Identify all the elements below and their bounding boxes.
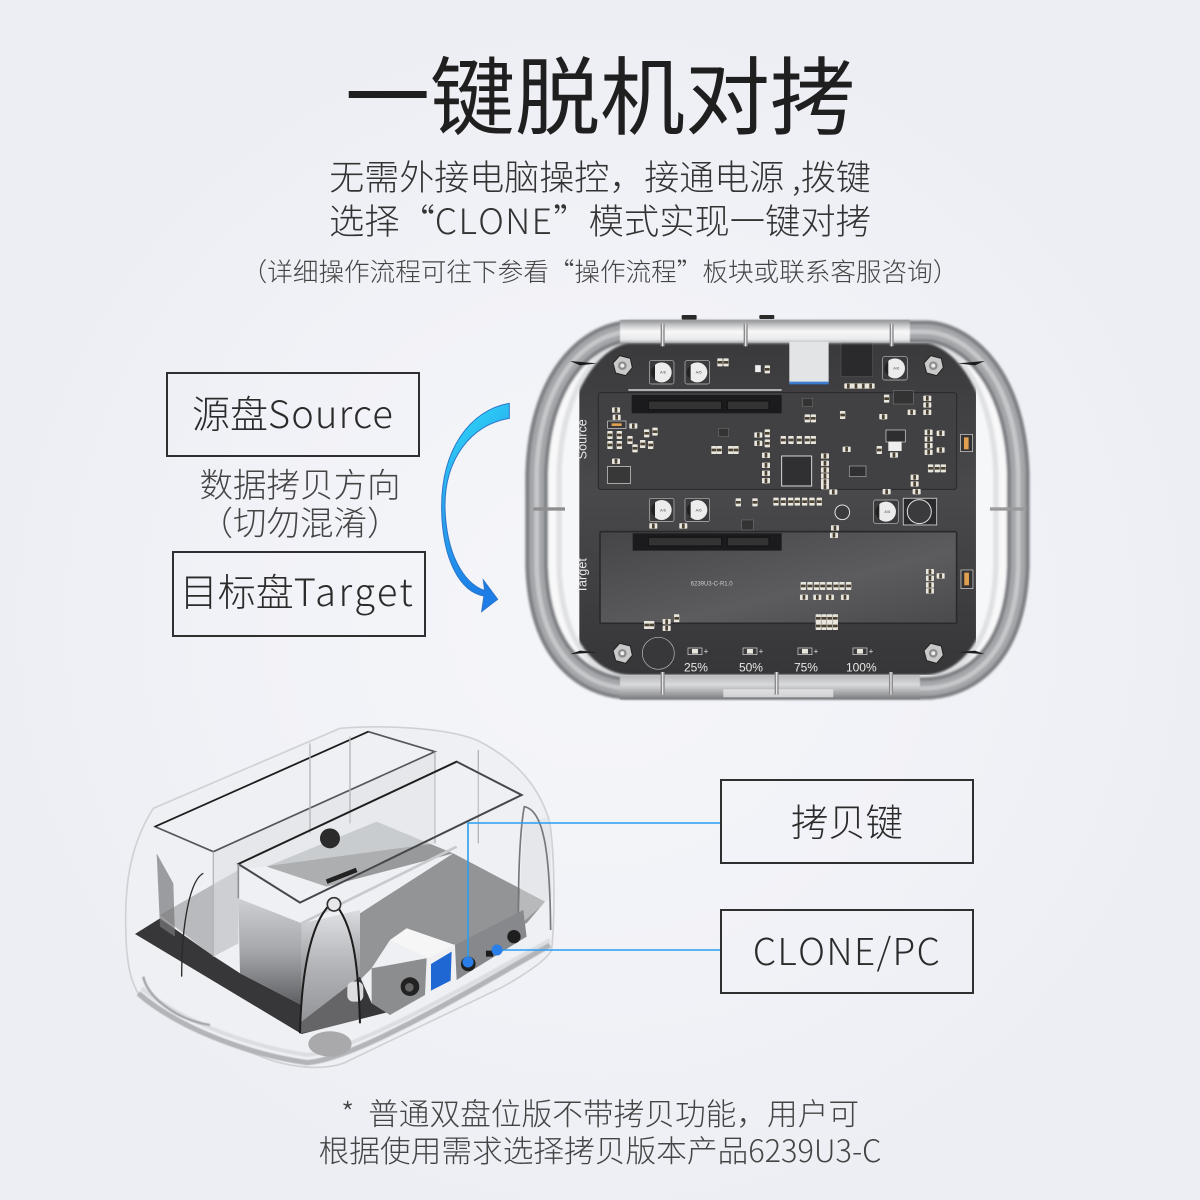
direction caption (200, 458, 400, 545)
bottom logo (723, 689, 833, 697)
board silkscreen labels: 50% (739, 660, 763, 674)
shell interior (537, 332, 1018, 688)
subtitle text: 无需外接电脑操控，接通电源 ,拨键 (329, 150, 871, 201)
rear wires (182, 873, 203, 977)
label: source disk: 源盘 (192, 384, 268, 439)
capacitor (347, 982, 363, 1002)
shell pins (661, 324, 665, 346)
front corner post (300, 902, 360, 1033)
buzzer (642, 637, 674, 669)
sata connectors (628, 389, 782, 551)
label: target disk (172, 551, 426, 637)
top clear band (620, 320, 910, 343)
label: CLONE/PC switch: CLONE/PC (753, 922, 941, 976)
shell ring (537, 332, 1018, 688)
label: copy key (720, 779, 974, 864)
callout line: clone switch (492, 944, 721, 956)
pcb right area (360, 853, 545, 980)
lower rim highlights (138, 940, 550, 1063)
board silkscreen labels (576, 419, 877, 674)
switches and side ticks (533, 315, 1027, 654)
usb port (789, 342, 829, 383)
outer shell (126, 727, 554, 1067)
foot (308, 1031, 352, 1057)
label: target disk: Target (294, 562, 415, 616)
pcb left area under rear bay (160, 870, 238, 957)
footnote (319, 1089, 881, 1171)
inductor (903, 498, 937, 525)
label: source disk (166, 372, 420, 457)
label: CLONE/PC switch (720, 909, 974, 994)
callout line: copy key (462, 823, 721, 968)
screws (613, 356, 632, 376)
footnote: 根据使用需求选择拷贝版本产品6239U3-C (319, 1126, 881, 1171)
board silkscreen labels: 25% (684, 660, 708, 674)
source bay (598, 393, 957, 489)
subtitle text: 选择“CLONE”模式实现一键对拷 (329, 194, 871, 245)
title: 一键脱机对拷 (345, 30, 855, 153)
subtitle text (329, 150, 871, 245)
label: target disk: 目标盘 (180, 562, 294, 616)
power jack (841, 342, 873, 377)
rear corner post (518, 807, 551, 930)
rear drive bay (155, 732, 478, 957)
board (579, 343, 976, 675)
rear connector panel (372, 910, 527, 1015)
direction caption: （切勿混淆） (200, 496, 400, 545)
board silkscreen labels: 100% (846, 660, 877, 674)
footnote: * 普通双盘位版不带拷贝功能，用户可 (341, 1089, 859, 1134)
board silkscreen labels: 6239U3-C-R1.0 (691, 581, 733, 587)
bottom clear band (620, 675, 920, 699)
wall behind front post (302, 910, 360, 1033)
capacitors (649, 361, 674, 384)
direction caption: 数据拷贝方向 (200, 458, 400, 507)
pcb under front bay (267, 822, 453, 887)
label: copy key: 拷贝键 (791, 792, 903, 846)
main chip (782, 456, 812, 486)
label: source disk: Source (268, 384, 394, 439)
board silkscreen labels: Source (576, 419, 590, 459)
board silkscreen labels: Target (576, 558, 590, 593)
pcb front strip (dark) (135, 918, 390, 1034)
board silkscreen labels: 75% (794, 660, 818, 674)
led indicators (688, 648, 873, 655)
note text: （详细操作流程可往下参看“操作流程”板块或联系客服咨询） (242, 252, 958, 289)
target bay (600, 532, 957, 623)
front drive bay (238, 762, 522, 1005)
small components (607, 358, 973, 631)
